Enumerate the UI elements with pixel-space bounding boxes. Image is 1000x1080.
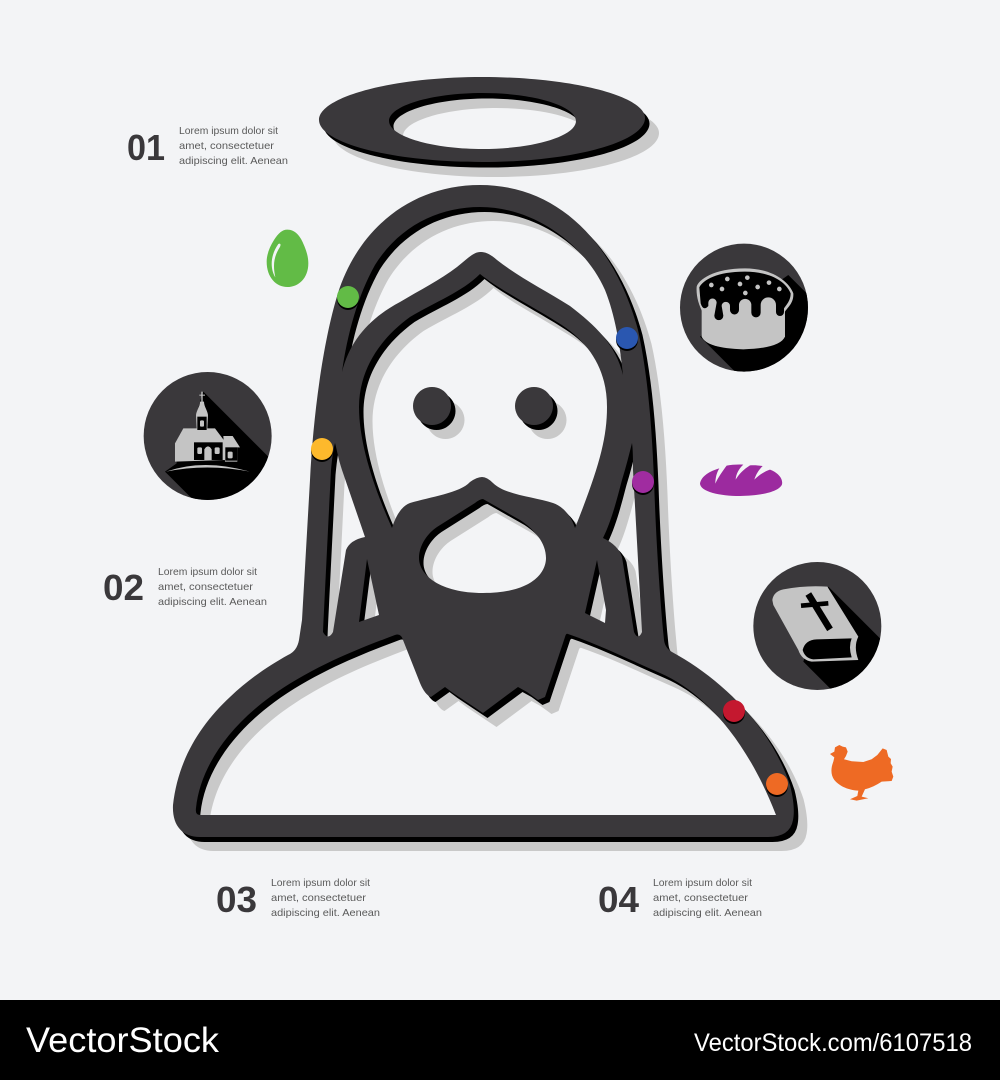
footer bar: VectorStock <box>26 1021 220 1060</box>
coloured marker dots <box>311 286 788 797</box>
step 02: Lorem ipsum dolor sit <box>158 566 257 578</box>
icon: orange hen <box>830 745 893 801</box>
icon: church badge <box>144 372 272 500</box>
step 02: 02 <box>103 567 144 608</box>
step 03: adipiscing elit. Aenean <box>271 907 380 919</box>
step 04 <box>598 877 762 920</box>
icon: green egg <box>267 230 308 287</box>
halo <box>319 77 659 177</box>
step 01: adipiscing elit. Aenean <box>179 155 288 167</box>
step 03: Lorem ipsum dolor sit <box>271 877 370 889</box>
step 01: Lorem ipsum dolor sit <box>179 125 278 137</box>
step 01: 01 <box>127 127 165 168</box>
step 03: amet, consectetuer <box>271 892 367 904</box>
step 04: amet, consectetuer <box>653 892 749 904</box>
step 02: amet, consectetuer <box>158 581 254 593</box>
step 03 <box>216 877 380 920</box>
step 02: adipiscing elit. Aenean <box>158 596 267 608</box>
step 01: amet, consectetuer <box>179 140 275 152</box>
step 04: 04 <box>598 879 639 920</box>
step 01 <box>127 125 288 168</box>
footer bar <box>0 1000 1000 1080</box>
footer bar: VectorStock.com/6107518 <box>694 1029 972 1057</box>
step 02 <box>103 566 267 608</box>
step 03: 03 <box>216 879 257 920</box>
church <box>166 392 250 472</box>
long shadow <box>165 392 268 500</box>
step 04: Lorem ipsum dolor sit <box>653 877 752 889</box>
figure: Jesus outline <box>173 185 807 851</box>
icon: purple bread <box>700 465 782 496</box>
icon: easter cake badge <box>680 244 808 372</box>
step 04: adipiscing elit. Aenean <box>653 907 762 919</box>
icon: bible badge <box>753 562 882 690</box>
